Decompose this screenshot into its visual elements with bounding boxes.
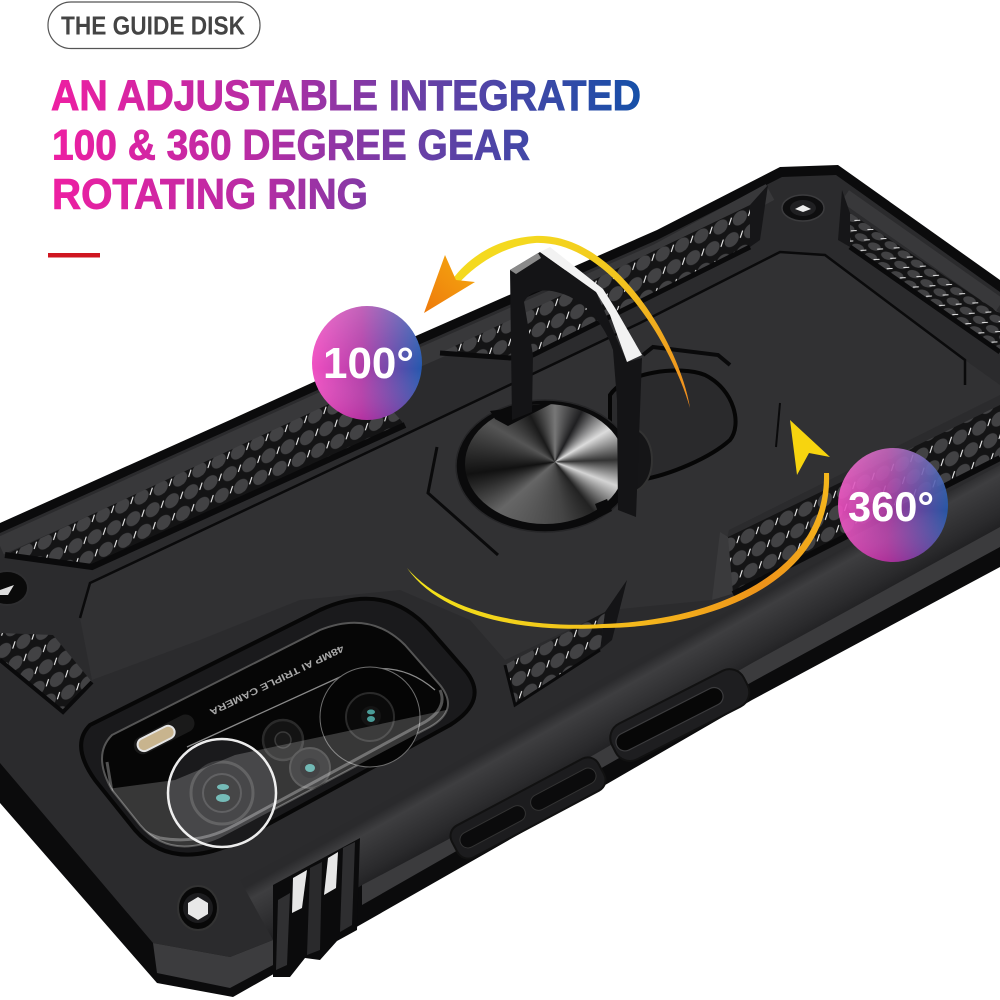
side wall shading <box>240 465 1000 940</box>
cradle hub <box>608 428 652 492</box>
heading: 100 & 360 DEGREE GEAR <box>52 122 530 170</box>
pill label: the guide disk <box>48 2 260 48</box>
small lens two <box>290 748 330 788</box>
side button: power <box>605 664 755 767</box>
heading: AN ADJUSTABLE INTEGRATED <box>51 72 641 120</box>
grip strip: camera left <box>0 633 92 712</box>
center back plate <box>80 252 1000 680</box>
grip strip: right <box>712 405 1000 600</box>
side wall light band <box>362 527 1000 905</box>
case top face <box>0 175 1000 957</box>
lens plate outline <box>187 669 435 747</box>
camera text: 48MP AI TRIPLE CAMERA <box>208 642 346 717</box>
ring disc base <box>456 400 634 532</box>
arrow: 360 degree <box>407 420 830 629</box>
screw: bottom <box>178 886 218 930</box>
screw: left <box>0 571 28 605</box>
camera glass <box>102 623 448 846</box>
top bevel bands <box>0 192 1000 546</box>
disc chamfer notches <box>490 402 612 517</box>
grip strip: lower middle <box>505 580 627 705</box>
port stripes <box>273 838 360 977</box>
top lens <box>320 667 420 767</box>
camera island <box>81 599 475 880</box>
badge: 100 degrees: 100° <box>323 339 414 388</box>
plate outline <box>80 252 965 618</box>
grip strip: top middle <box>440 185 768 358</box>
corner wall band <box>153 940 273 988</box>
small lens one <box>263 720 303 760</box>
glass reflection <box>106 690 447 846</box>
badge: 360 degrees: 360° <box>848 483 934 530</box>
screw: top right <box>782 195 824 221</box>
ring white edge <box>540 247 642 362</box>
badge: 100 degrees <box>312 306 422 420</box>
ring top cap <box>510 253 541 274</box>
pill label: the guide disk: THE GUIDE DISK <box>61 10 245 40</box>
ring stand <box>510 252 642 517</box>
flash <box>131 711 198 757</box>
red accent line <box>48 253 100 258</box>
ring disc metal <box>465 404 625 524</box>
main lens <box>168 739 276 847</box>
heading: ROTATING RING <box>52 170 368 218</box>
grip strip: top right <box>838 190 1000 352</box>
ring mount recess lines <box>428 347 780 555</box>
heading <box>51 72 641 218</box>
island rim <box>81 599 475 855</box>
arrow: 100 degree <box>424 236 690 408</box>
grip strip: top left long <box>5 385 405 567</box>
side button: volume <box>446 753 610 863</box>
ring cradle <box>610 371 736 480</box>
badge: 360 degrees <box>838 448 948 562</box>
